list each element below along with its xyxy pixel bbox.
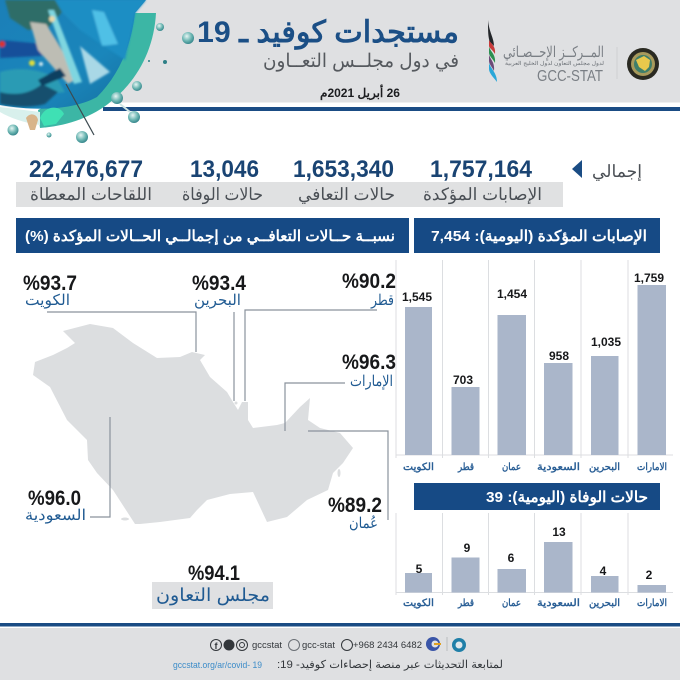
title: مستجدات كوفيد ـ 19 [197,16,459,50]
subtitle: في دول مجلــس التعــاون [263,51,459,72]
teal arc [38,13,156,128]
bar chart: daily confirmed: البحرين [589,462,620,473]
label: UAE: %96.3 [342,351,396,374]
label: Qatar [342,270,396,309]
bar chart: daily confirmed: 1,035 [591,335,621,349]
label: UAE: الإمارات [350,373,393,390]
logo: GCC-STAT [488,20,604,85]
label: Qatar: %90.2 [342,270,396,293]
bar chart: daily confirmed: 958 [549,349,569,363]
total label: إجمالي [592,162,642,181]
bar chart: daily deaths: قطر [457,598,474,609]
footer link line: gccstat.org/ar/covid- 19 [173,660,262,671]
divider and logo emblem [617,47,659,80]
heading: daily confirmed: الإصابات المؤكدة (اليومية): 7,454 [431,228,647,245]
stat: vaccines [29,156,152,204]
bar chart: daily deaths: الامارات [637,598,667,609]
bar chart: daily confirmed: 703 [453,373,473,387]
label: Qatar: قطر [370,292,394,309]
label: Kuwait [23,272,77,309]
label: Bahrain: %93.4 [192,272,246,295]
label: GCC total: مجلس التعاون [156,585,270,606]
stat: confirmed: 1,757,164 [430,156,533,183]
bar chart: daily confirmed: الامارات [637,462,667,473]
contact text: +968 2434 6482 [353,640,422,651]
bar chart: daily confirmed [396,260,673,473]
label: GCC total [152,562,273,609]
logo: GCC-STAT: GCC-STAT [537,68,603,85]
label: Bahrain: البحرين [194,292,241,309]
bar chart: daily deaths: 6 [508,551,515,565]
label: Oman: %89.2 [328,494,382,517]
label: Saudi Arabia: السعودية [25,507,86,524]
heading: daily deaths [414,483,660,510]
arrow [572,160,582,178]
contact text [252,640,422,651]
contact text: gccstat [252,640,282,651]
leader lines [47,310,388,520]
header band [0,0,680,111]
map of GCC [33,324,353,524]
logo: GCC-STAT: المــركــز الإحــصـائي [503,44,604,61]
label: Oman: عُمان [349,514,378,532]
icons: social: f [214,641,218,651]
bar chart: daily confirmed: السعودية [537,462,580,473]
bar chart: daily confirmed: قطر [457,462,474,473]
footer link line: لمتابعة التحديثات عبر منصة إحصاءات كوفيد- 19: [277,659,503,671]
stat: recovered [293,156,395,204]
bar chart: daily confirmed: 1,759 [634,271,664,285]
heading: daily deaths: حالات الوفاة (اليومية): 39 [486,489,648,506]
summary band [16,156,563,207]
bar chart: daily deaths: البحرين [589,598,620,609]
stat: confirmed [423,156,542,205]
bar chart: daily confirmed: 1,545 [402,290,432,304]
label: Saudi Arabia [25,487,86,524]
label: Saudi Arabia: %96.0 [28,487,81,510]
footer link line [173,659,503,671]
stat: deaths [182,156,263,205]
heading: recovery share [16,218,409,253]
bar chart: daily deaths: 4 [600,564,607,578]
bar chart: daily confirmed: عمان [502,462,521,473]
stat: vaccines: اللقاحات المعطاة [30,185,152,204]
needle [66,84,94,135]
bar chart: daily deaths: 13 [552,525,566,539]
bar chart: daily deaths: 2 [646,568,653,582]
icons: agency logos [426,637,466,652]
contact text: gcc-stat [302,640,335,651]
logo: GCC-STAT: لدول مجلس التعاون لدول الخليج العربية [505,60,604,67]
stat: deaths: 13,046 [190,156,259,183]
bar chart: daily deaths [396,513,673,609]
label: GCC total: %94.1 [188,562,240,585]
bar chart: daily deaths: 9 [464,541,471,555]
label: Kuwait: الكويت [25,292,70,309]
bar chart: daily deaths: 5 [416,562,423,576]
label: Bahrain [192,272,246,309]
heading: daily confirmed [414,218,660,253]
bar chart: daily confirmed: 1,454 [497,287,527,301]
bar chart: daily deaths: عمان [502,598,521,609]
stat: recovered: حالات التعافي [298,185,395,204]
stat: vaccines: 22,476,677 [29,156,143,183]
date: 26 أبريل 2021م [320,85,400,101]
bar chart: daily deaths: الكويت [403,598,434,609]
heading: recovery share: نسبــة حــالات التعافــي من إجمالــي الحــالات المؤكدة (%) [25,228,395,246]
bar chart: daily confirmed: الكويت [403,462,434,473]
stat: recovered: 1,653,340 [293,156,394,183]
footer [0,623,680,680]
label: UAE [342,351,396,390]
blue disc [0,0,146,109]
header illustration: virus and network circle [0,0,194,143]
stat: confirmed: الإصابات المؤكدة [423,185,542,205]
bar chart: daily deaths: السعودية [537,598,580,609]
icons: social [210,640,352,651]
label: Kuwait: %93.7 [23,272,77,295]
stat: deaths: حالات الوفاة [182,185,263,205]
label: Oman [328,494,382,532]
